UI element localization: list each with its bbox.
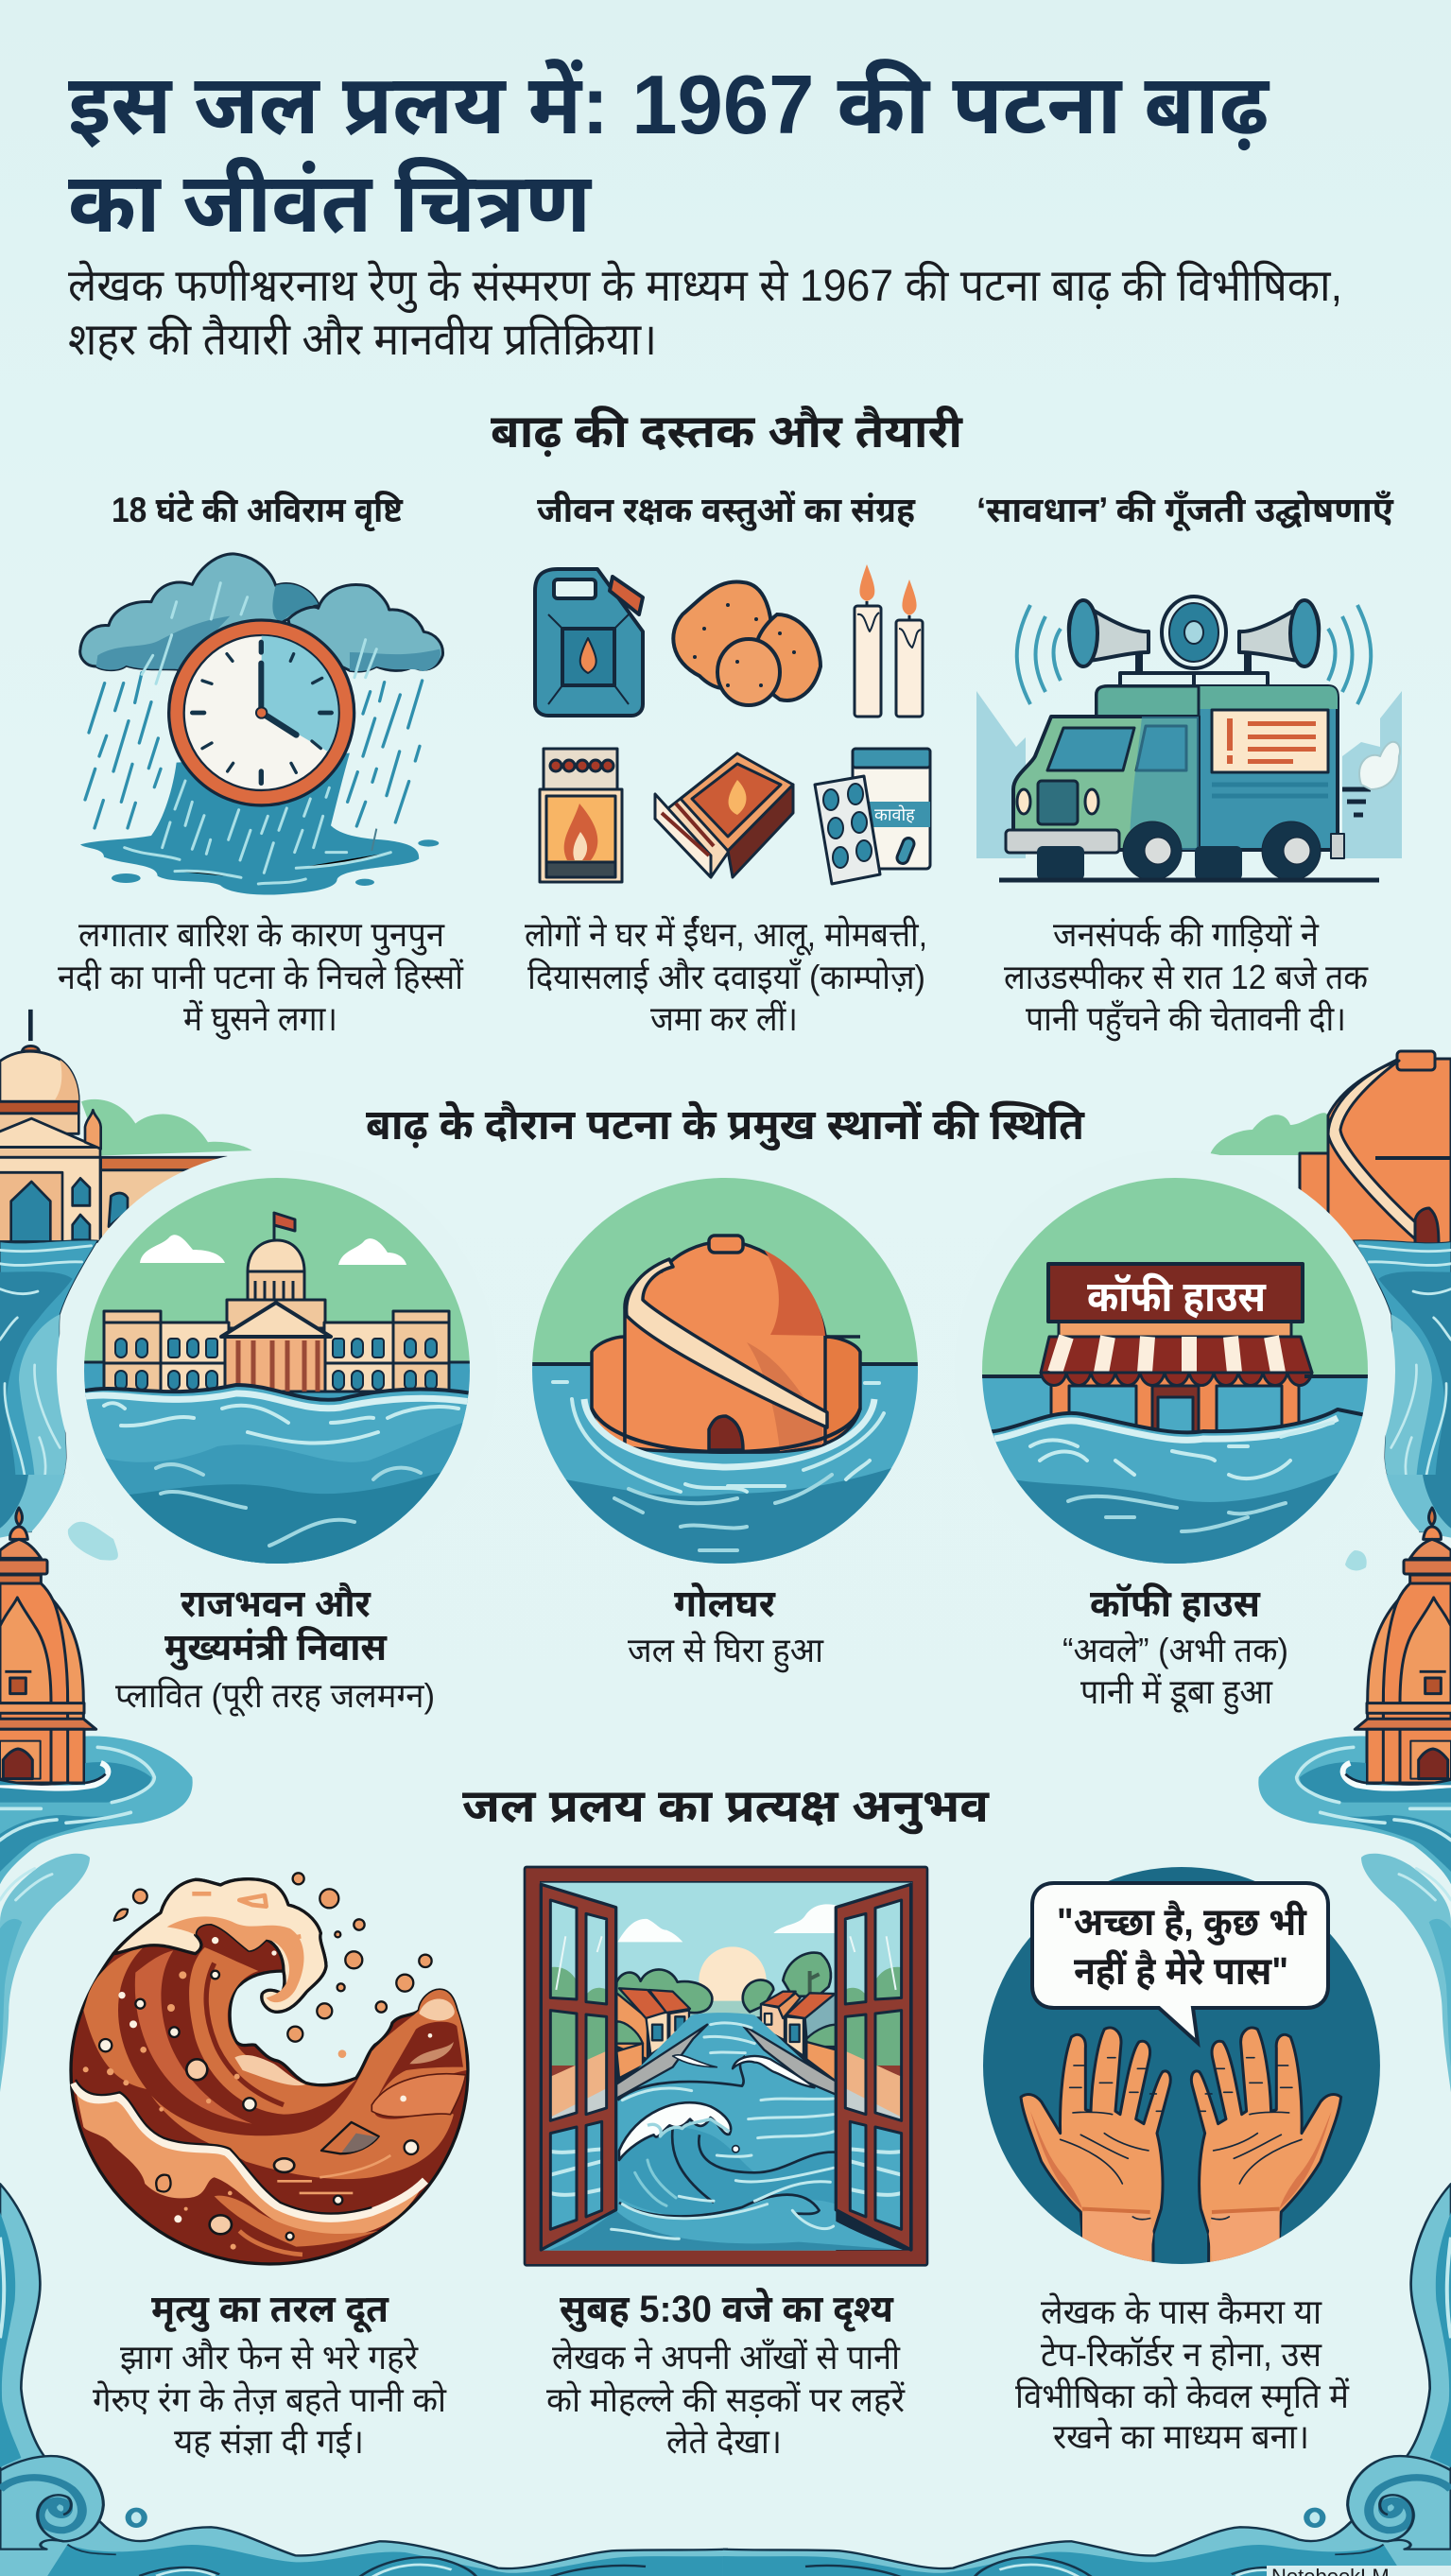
place caption: golghar [628,1582,824,1673]
illustration: coffee house in water: कॉफी हाउस [1087,1272,1267,1321]
row 3 text: morning scene: सुबह 5:30 वजे का दृश्य [560,2288,894,2332]
row 3 text: morning scene: लेखक ने अपनी आँखों से पानी [552,2337,901,2377]
decoration: right temple [1258,1475,1451,2092]
section heading: direct experience: जल प्रलय का प्रत्यक्ष अनुभव [462,1781,990,1836]
section heading: flood arrival: बाढ़ की दस्तक और तैयारी [491,405,964,458]
icon: potatoes [673,581,821,705]
icon: open matchbox [655,753,793,877]
row 1 text: rain: लगातार बारिश के कारण पुनपुन [78,915,445,956]
row 1 text: warnings: जनसंपर्क की गाड़ियों ने [1053,915,1320,954]
decoration: left flood water [0,1240,97,1532]
illustration: golghar in water [529,1178,926,1572]
subtitle [68,260,1342,364]
decoration: right corner golghar [1210,1051,1451,1267]
place caption: coffee house: “अवले” (अभी तक) [1062,1631,1288,1669]
place caption: golghar: गोलघर [674,1582,776,1625]
row 3 text: memory [1015,2292,1350,2456]
icon: candles [855,564,923,717]
row 1 text: supplies: दियासलाई और दवाइयाँ (काम्पोज़) [527,957,925,996]
section heading: status of places: बाढ़ के दौरान पटना के प्रमुख स्थानों की स्थिति [366,1100,1085,1150]
row 1 text: warnings: लाउडस्पीकर से रात 12 बजे तक [1004,958,1369,996]
place caption: coffee house: कॉफी हाउस [1090,1582,1261,1625]
illustration: raj bhavan flooded [80,1178,477,1570]
decoration: right flood water [1354,1240,1451,1532]
row 3 text: liquid messenger: गेरुए रंग के तेज़ बहते पानी को [93,2380,447,2419]
row 3 text: memory: रखने का माध्यम बना। [1053,2417,1309,2456]
halo behind left circle [57,1150,497,1591]
speech bubble: "अच्छा है, कुछ भी [1057,1899,1307,1945]
place caption: raj bhavan: राजभवन और [181,1582,371,1625]
column heading: rain: 18 घंटे की अविराम वृष्टि [112,490,404,531]
row 3 text: memory: टेप-रिकॉर्डर न होना, उस [1041,2335,1322,2374]
place caption: raj bhavan: प्लावित (पूरी तरह जलमग्न) [115,1676,435,1717]
speech bubble: नहीं है मेरे पास" [1074,1948,1288,1993]
title: इस जल प्रलय में: 1967 की पटना बाढ़ [68,58,1270,151]
column heading: supplies: जीवन रक्षक वस्तुओं का संग्रह [537,490,916,531]
title [68,58,1270,250]
subtitle: शहर की तैयारी और मानवीय प्रतिक्रिया। [68,314,657,364]
place caption: coffee house [1062,1582,1288,1715]
row 3 text: liquid messenger: झाग और फेन से भरे गहरे [120,2338,419,2377]
illustration: liquid wave [71,1873,468,2264]
illustration: coffee house in water [976,1178,1380,1574]
row 3 text: liquid messenger [93,2289,447,2461]
decoration: left corner palace [0,1010,252,1243]
title: का जीवंत चित्रण [68,156,593,250]
decoration: bottom right wave border [723,2184,1451,2576]
row 3 text: morning scene: लेते देखा। [666,2422,782,2461]
subtitle: लेखक फणीश्वरनाथ रेणु के संस्मरण के माध्यम से 1967 की पटना बाढ़ की विभीषिका, [68,260,1342,314]
watermark strip [1267,2565,1451,2576]
place caption: raj bhavan: मुख्यमंत्री निवास [164,1626,388,1670]
place caption: coffee house: पानी में डूबा हुआ [1080,1672,1273,1715]
icon: matchbox standing [540,749,622,882]
icon: medicines: कावोह [874,805,915,824]
row 3 text: liquid messenger: मृत्यु का तरल दूत [151,2289,389,2333]
decoration: droplets [68,1522,1367,1570]
row 1 text: supplies [525,915,927,1038]
row 1 text: warnings: पानी पहुँचने की चेतावनी दी। [1026,998,1346,1042]
halo behind right circle [955,1150,1395,1591]
row 1 text: rain [58,915,464,1040]
icon: medicines [815,749,930,884]
row 1 text: supplies: जमा कर लीं। [650,999,798,1038]
icon: jerry can [535,569,643,716]
row 1 text: rain: में घुसने लगा। [183,999,337,1040]
speech bubble [1032,1883,1328,2043]
row 1 text: rain: नदी का पानी पटना के निचले हिस्सों [58,958,464,996]
icon: clock in rain [80,554,442,895]
icon: announcement van [976,596,1402,880]
column heading: warnings: ‘सावधान’ की गूँजती उद्घोषणाएँ [976,490,1395,531]
place caption: raj bhavan [115,1582,435,1717]
place caption: golghar: जल से घिरा हुआ [628,1631,824,1673]
row 1 text: supplies: लोगों ने घर में ईंधन, आलू, मोमबत्ती, [525,915,927,956]
row 3 text: liquid messenger: यह संज्ञा दी गई। [174,2422,364,2461]
row 3 text: memory: विभीषिका को केवल स्मृति में [1015,2377,1350,2417]
illustration: window view of flood [525,1867,927,2265]
decoration: bottom left wave border [0,2184,728,2576]
row 3 text: morning scene [546,2288,906,2461]
row 1 text: warnings [1004,915,1369,1042]
row 3 text: memory: लेखक के पास कैमरा या [1041,2292,1322,2331]
row 3 text: morning scene: को मोहल्ले की सड़कों पर लहरें [546,2380,906,2419]
illustration: empty hands [983,1867,1380,2269]
decoration: left temple [0,1475,193,2092]
